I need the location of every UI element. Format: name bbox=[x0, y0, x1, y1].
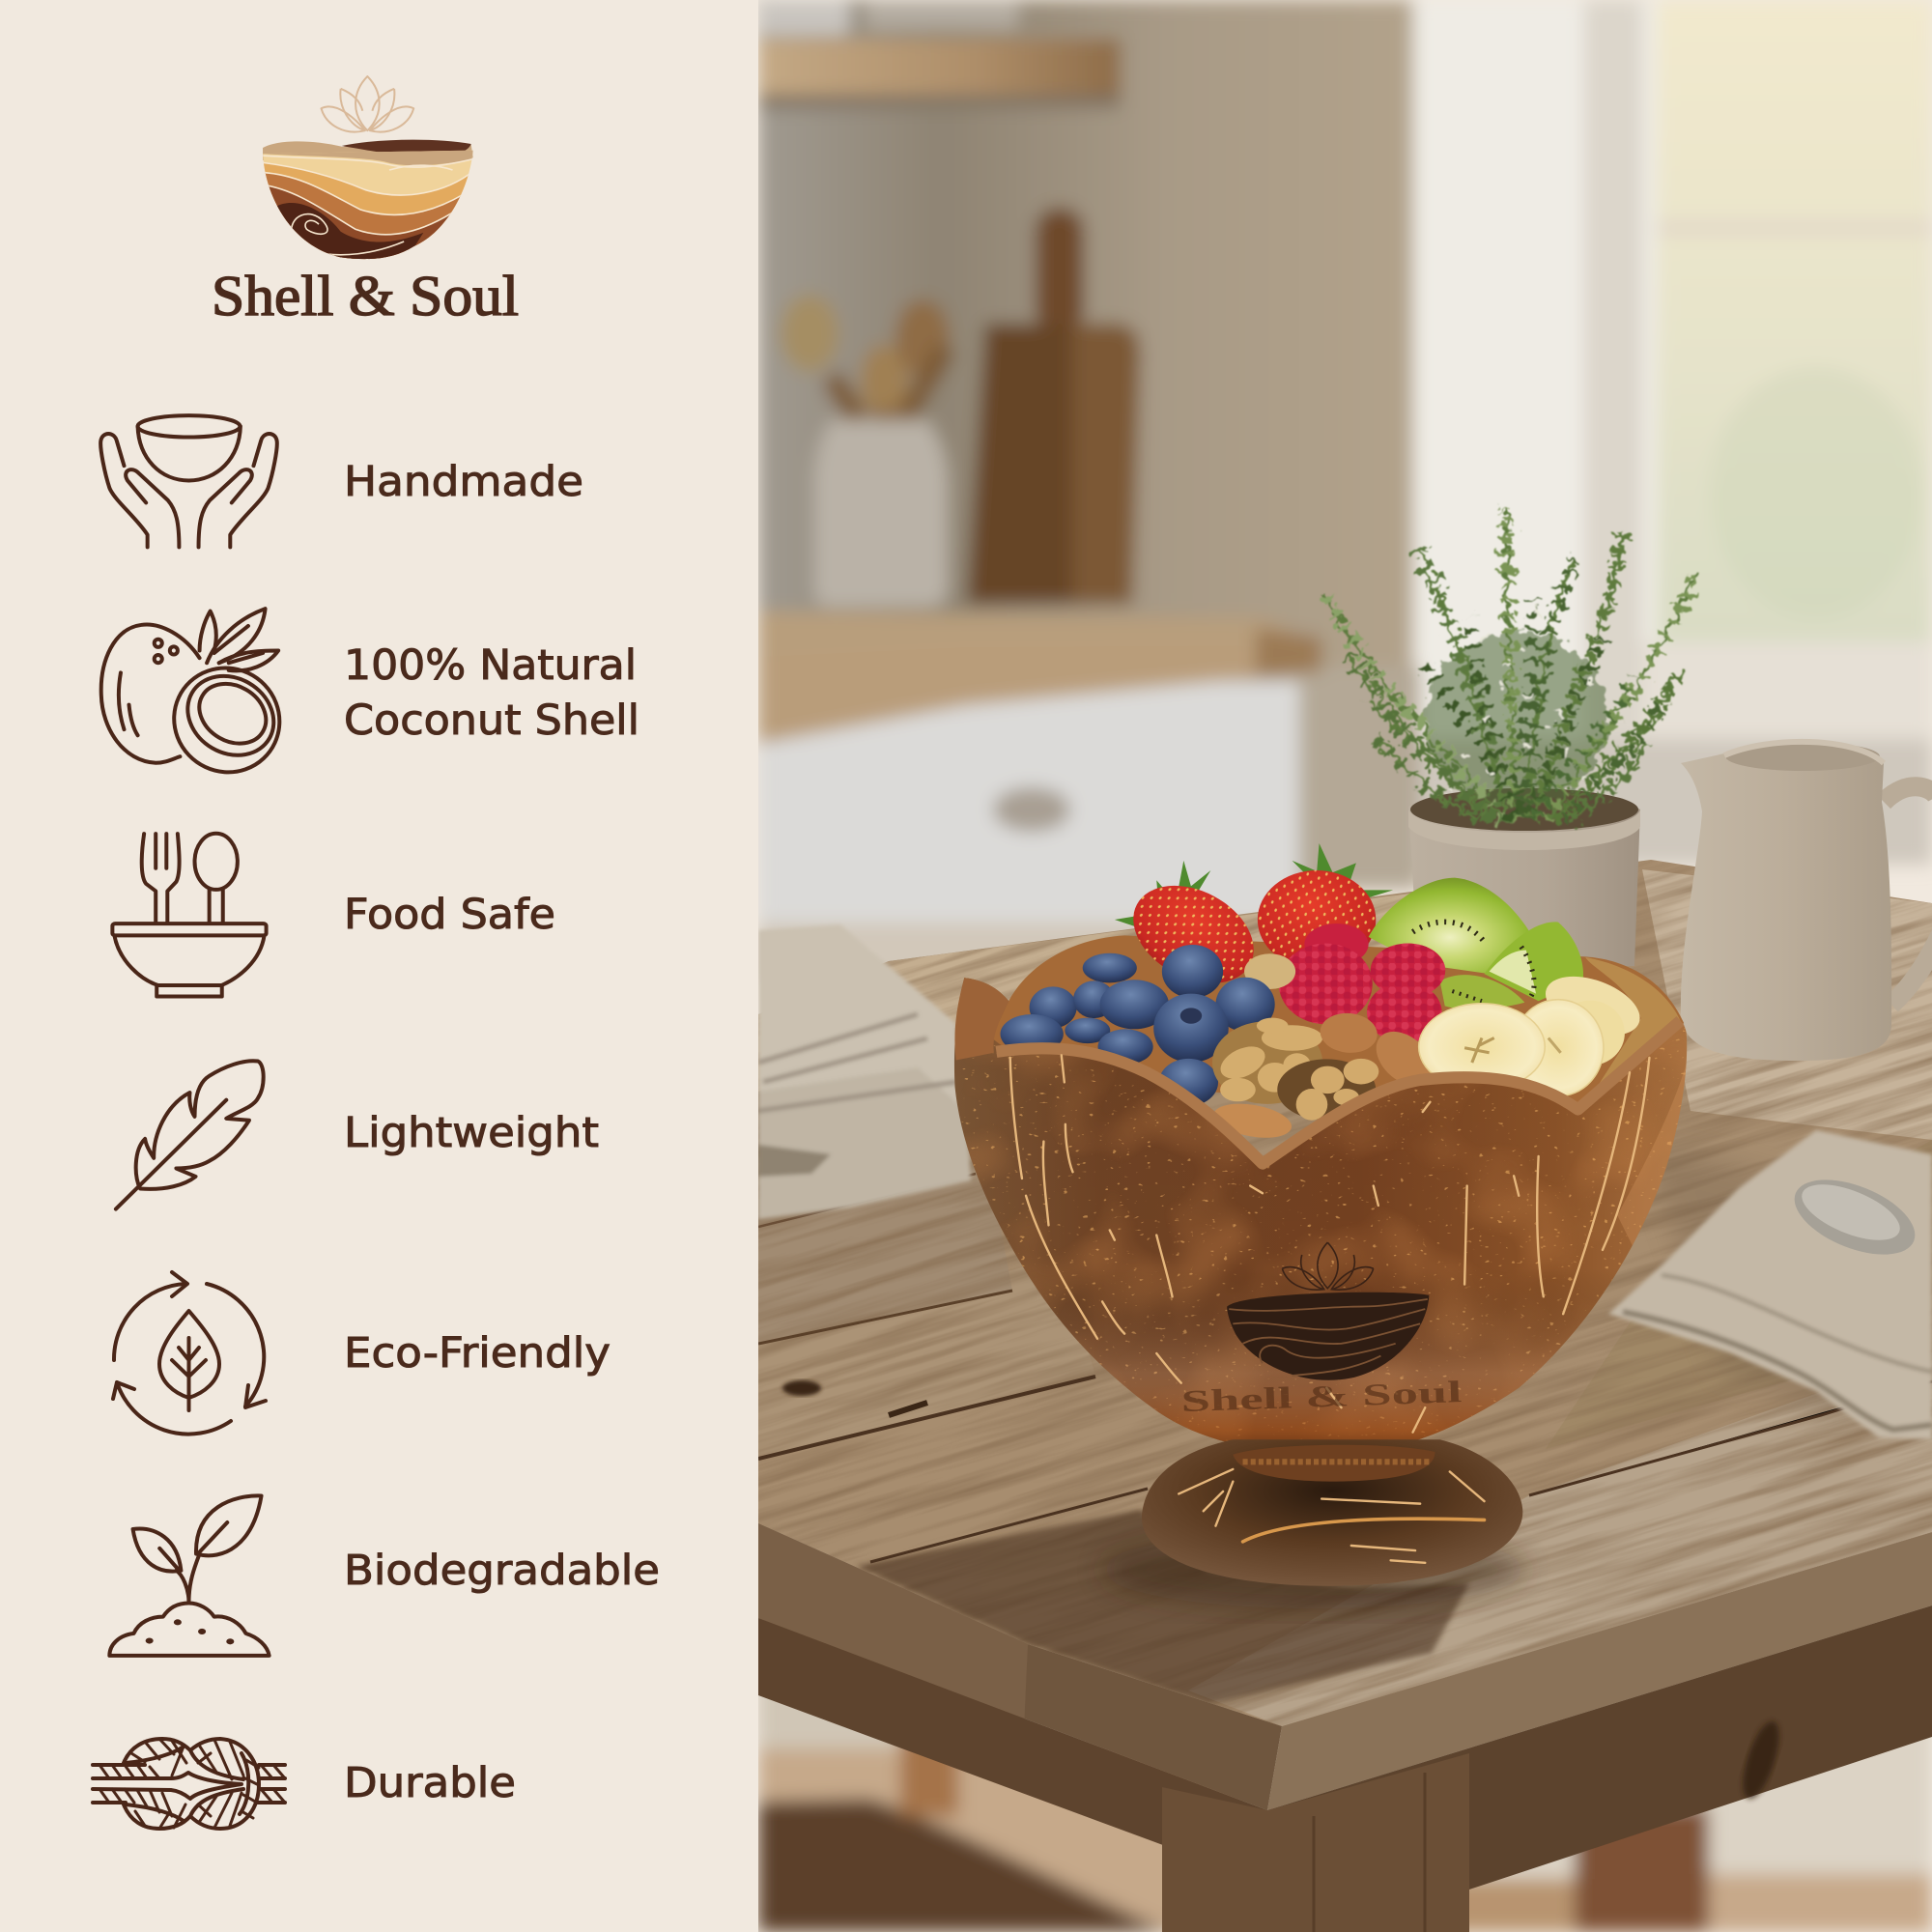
engraved logo on bowl bbox=[1180, 1242, 1463, 1418]
label: 100% Natural Coconut Shell: Coconut Shell bbox=[344, 696, 639, 745]
icon: feather bbox=[116, 1061, 264, 1209]
bowl outer shell bbox=[954, 978, 1687, 1441]
blueberries bbox=[1001, 945, 1295, 1106]
panel: left feature column bbox=[0, 0, 758, 1932]
kiwi slices bbox=[1369, 878, 1583, 1009]
table shadow under bowl bbox=[1101, 1531, 1526, 1608]
logo bowl bbox=[258, 140, 477, 271]
brand name: Shell & Soul bbox=[212, 264, 519, 327]
plant pot bbox=[1408, 788, 1640, 966]
label: 100% Natural Coconut Shell: 100% Natural bbox=[344, 641, 637, 690]
strawberries bbox=[1115, 843, 1393, 983]
banana slices bbox=[1418, 976, 1640, 1095]
napkin: left bbox=[758, 924, 971, 1219]
label: Durable: Durable bbox=[344, 1759, 516, 1807]
icon: sprout in soil bbox=[109, 1495, 270, 1656]
interior right petal bbox=[1586, 957, 1681, 1083]
kitchen background bbox=[758, 0, 1932, 1932]
label: Lightweight: Lightweight bbox=[344, 1109, 599, 1157]
bowl interior bbox=[964, 935, 1684, 1117]
icon: hands holding bowl bbox=[100, 415, 277, 547]
spoon bbox=[1795, 1180, 1915, 1254]
rim lip bbox=[996, 1021, 1681, 1164]
label: 100% Natural Coconut Shell bbox=[344, 641, 639, 745]
walnuts and almonds bbox=[1212, 1012, 1430, 1138]
icon: rope knot bbox=[93, 1739, 285, 1829]
coconut bowl with fruit bbox=[927, 843, 1726, 1586]
label: Biodegradable: Biodegradable bbox=[344, 1547, 660, 1595]
logo lotus bbox=[322, 76, 413, 132]
pitcher bbox=[1681, 742, 1932, 1061]
logo: bowl and lotus bbox=[258, 76, 477, 271]
plant: herb bbox=[1325, 509, 1695, 819]
panel: product photo bbox=[758, 0, 1932, 1932]
coconut fibre streaks bbox=[1010, 1055, 1649, 1433]
label: Eco-Friendly: Eco-Friendly bbox=[344, 1329, 611, 1378]
icon: recycling leaf bbox=[113, 1272, 266, 1435]
label: Food Safe: Food Safe bbox=[344, 891, 555, 939]
raspberries bbox=[1279, 923, 1445, 1043]
icon: bowl with fork and spoon bbox=[112, 834, 267, 997]
bowl pedestal foot bbox=[1142, 1439, 1522, 1586]
label: Handmade: Handmade bbox=[344, 458, 583, 506]
engraved logo on bowl: Shell & Soul bbox=[1180, 1375, 1463, 1418]
icon: coconut bbox=[101, 609, 297, 789]
napkin: right bbox=[1608, 1130, 1932, 1439]
table bbox=[758, 860, 1932, 1932]
